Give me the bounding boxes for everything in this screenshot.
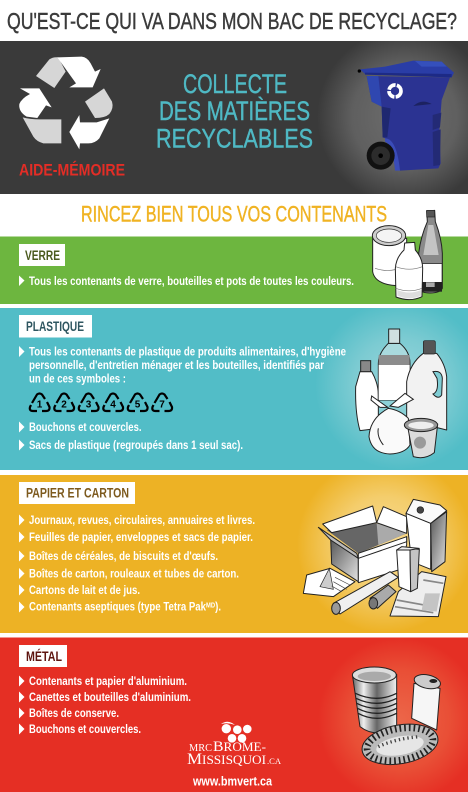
heading: collecte des matières recyclables: COLLECTE [183, 69, 287, 99]
list: papier et carton: ). [215, 602, 221, 614]
list: plastique: personnelle, d'entretien ménager et les bouteilles, identifiés par [29, 360, 324, 372]
website: www.bmvert.ca [192, 774, 273, 789]
subtitle: aide-mémoire: AIDE-MÉMOIRE [19, 160, 125, 180]
icons: plastic resin codes [30, 394, 172, 411]
list: verre: Tous les contenants de verre, bouteilles et pots de toutes les couleurs. [29, 276, 354, 288]
illustration: cans and aluminium pie tin [352, 667, 442, 770]
list: papier et carton: Feuilles de papier, enveloppes et sacs de papier. [29, 532, 253, 544]
list: métal: Contenants et papier d'aluminium. [29, 676, 187, 688]
illustration: plastic bottles, bag and cup [356, 329, 447, 458]
list: papier et carton: Boîtes de carton, rouleaux et tubes de carton. [29, 569, 239, 581]
list: plastique: un de ces symboles : [29, 373, 126, 385]
icons: plastic resin codes: 7 [159, 400, 165, 410]
list: papier et carton: MD [206, 603, 215, 610]
label: papier et carton: PAPIER ET CARTON [26, 486, 129, 501]
icons: plastic resin codes: 4 [110, 400, 116, 410]
list: papier et carton: Cartons de lait et de jus. [29, 585, 140, 597]
label: plastique [19, 315, 92, 338]
list: plastique: Bouchons et couvercles. [29, 422, 142, 434]
icons: plastic resin codes: 1 [37, 400, 43, 410]
list: papier et carton: Boîtes de céréales, de biscuits et d'œufs. [29, 551, 218, 563]
list: papier et carton: Contenants aseptiques (type Tetra Pak [29, 602, 240, 614]
illustration: glass jars and bottles [372, 210, 442, 300]
icon: blue recycling bin [358, 61, 454, 171]
label: métal: MÉTAL [26, 649, 62, 664]
list: plastique [19, 346, 346, 452]
label: verre: VERRE [25, 248, 60, 263]
panel: verre [0, 210, 468, 304]
logo: MRC Brome-Missisquoi: .CA [267, 757, 281, 766]
heading: collecte des matières recyclables [156, 69, 313, 154]
icons: plastic resin codes: 3 [86, 400, 92, 410]
list: métal: Canettes et bouteilles d'aluminium. [29, 692, 191, 704]
icon: recycling symbol [19, 57, 113, 149]
logo: MRC Brome-Missisquoi: MRC [189, 743, 212, 754]
panel: header [0, 41, 468, 194]
panel: plastique [0, 308, 468, 470]
list: plastique: Tous les contenants de plastique de produits alimentaires, d'hygiène [29, 347, 346, 359]
icons: plastic resin codes: 2 [61, 400, 67, 410]
list: métal [19, 676, 191, 736]
label: métal [19, 645, 67, 667]
list: plastique: Sacs de plastique (regroupés dans 1 seul sac). [29, 440, 243, 452]
logo: MRC Brome-Missisquoi: BROME- [213, 739, 266, 755]
panel: papier et carton [0, 475, 468, 633]
panel: métal [0, 638, 468, 792]
logo: MRC Brome-Missisquoi: MISSISQUOI [187, 751, 266, 768]
heading: collecte des matières recyclables: DES MATIÈRES [159, 96, 310, 126]
label: verre [19, 244, 65, 266]
heading: collecte des matières recyclables: RECYCLABLES [156, 124, 313, 154]
icons: plastic resin codes: 5 [135, 400, 141, 410]
illustration: cardboard box, cartons and newspapers [303, 499, 447, 617]
list: papier et carton [19, 514, 255, 614]
list: métal: Bouchons et couvercles. [29, 724, 141, 736]
list: papier et carton: Journaux, revues, circulaires, annuaires et livres. [29, 515, 255, 527]
logo: MRC Brome-Missisquoi [187, 722, 281, 768]
list: métal: Boîtes de conserve. [29, 708, 119, 720]
label: plastique: PLASTIQUE [26, 319, 84, 334]
label: papier et carton [19, 482, 135, 504]
